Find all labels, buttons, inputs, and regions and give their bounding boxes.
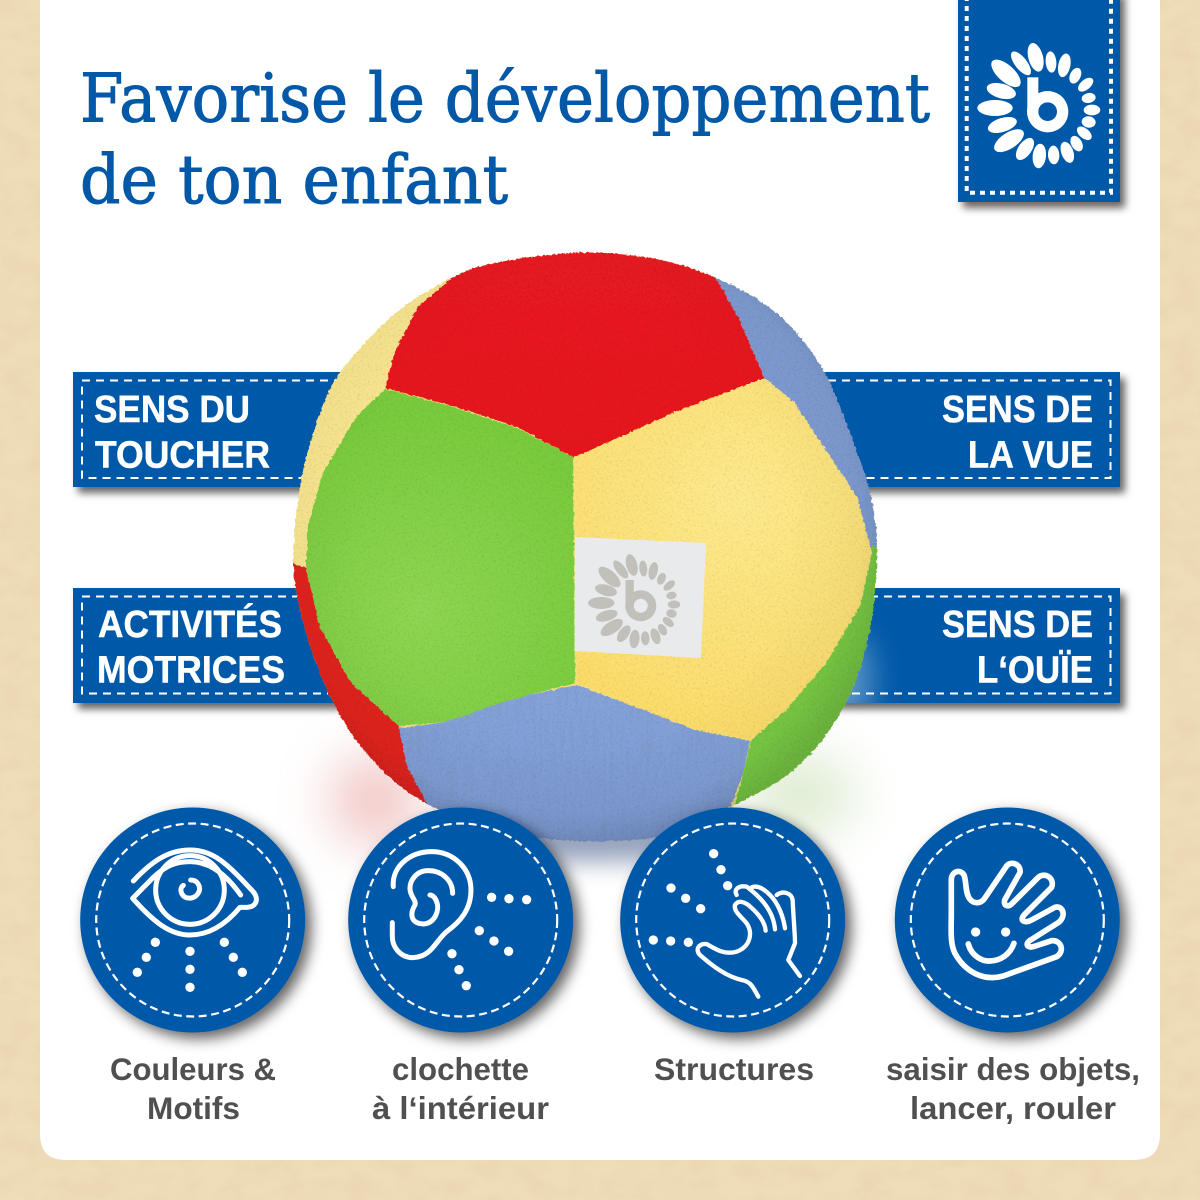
title [80, 60, 930, 219]
banner: activités motrices: MOTRICES [97, 650, 285, 692]
title: Favorise le développement [80, 60, 930, 138]
caption: couleurs et motifs [110, 1051, 276, 1126]
banner: sens du toucher: TOUCHER [95, 434, 270, 476]
badge: touching hand [620, 808, 845, 1032]
ball panel: blue bottom [399, 685, 750, 850]
badge: ear [348, 808, 573, 1032]
banner: sens de la vue: SENS DE [942, 389, 1093, 431]
badge: smiling hand [895, 808, 1120, 1032]
banner: sens du toucher [73, 372, 373, 487]
caption: saisir des objets, lancer, rouler: lancer, rouler [910, 1090, 1116, 1126]
banner: sens du toucher: SENS DU [94, 389, 250, 431]
banner: sens de l'ouïe [840, 588, 1131, 715]
caption: couleurs et motifs: Motifs [147, 1090, 240, 1126]
caption: saisir des objets, lancer, rouler [886, 1051, 1140, 1126]
banner: sens de la vue: LA VUE [968, 434, 1093, 476]
badge: eye [80, 808, 305, 1032]
ball panel: yellow center [575, 378, 872, 740]
title: de ton enfant [80, 141, 508, 219]
caption: structures: Structures [654, 1051, 814, 1087]
ball panel: yellow left [292, 278, 452, 568]
sewn label [574, 537, 706, 658]
caption: clochette à l'intérieur: à l‘intérieur [372, 1090, 549, 1126]
banner: sens de la vue [800, 372, 1120, 487]
caption: clochette à l'intérieur [372, 1051, 549, 1126]
banner: sens de l'ouïe: SENS DE [942, 604, 1093, 646]
ball panel: blue right [712, 276, 878, 550]
caption: couleurs et motifs: Couleurs & [110, 1051, 276, 1087]
ball panel: red left [292, 562, 428, 804]
banner: activités motrices [73, 588, 373, 703]
banner: sens de l'ouïe: L‘OUÏE [977, 648, 1093, 692]
caption: saisir des objets, lancer, rouler: saisir des objets, [886, 1051, 1140, 1087]
caption: clochette à l'intérieur: clochette [392, 1051, 529, 1087]
ball panel: green right [735, 545, 878, 804]
ball panel: green left [306, 389, 575, 726]
logo tag [958, 0, 1120, 202]
banner: activités motrices: ACTIVITÉS [98, 602, 282, 646]
ball panel: red top [385, 240, 764, 457]
plush ball [280, 240, 900, 855]
ball soft glow and shadow [330, 755, 855, 862]
